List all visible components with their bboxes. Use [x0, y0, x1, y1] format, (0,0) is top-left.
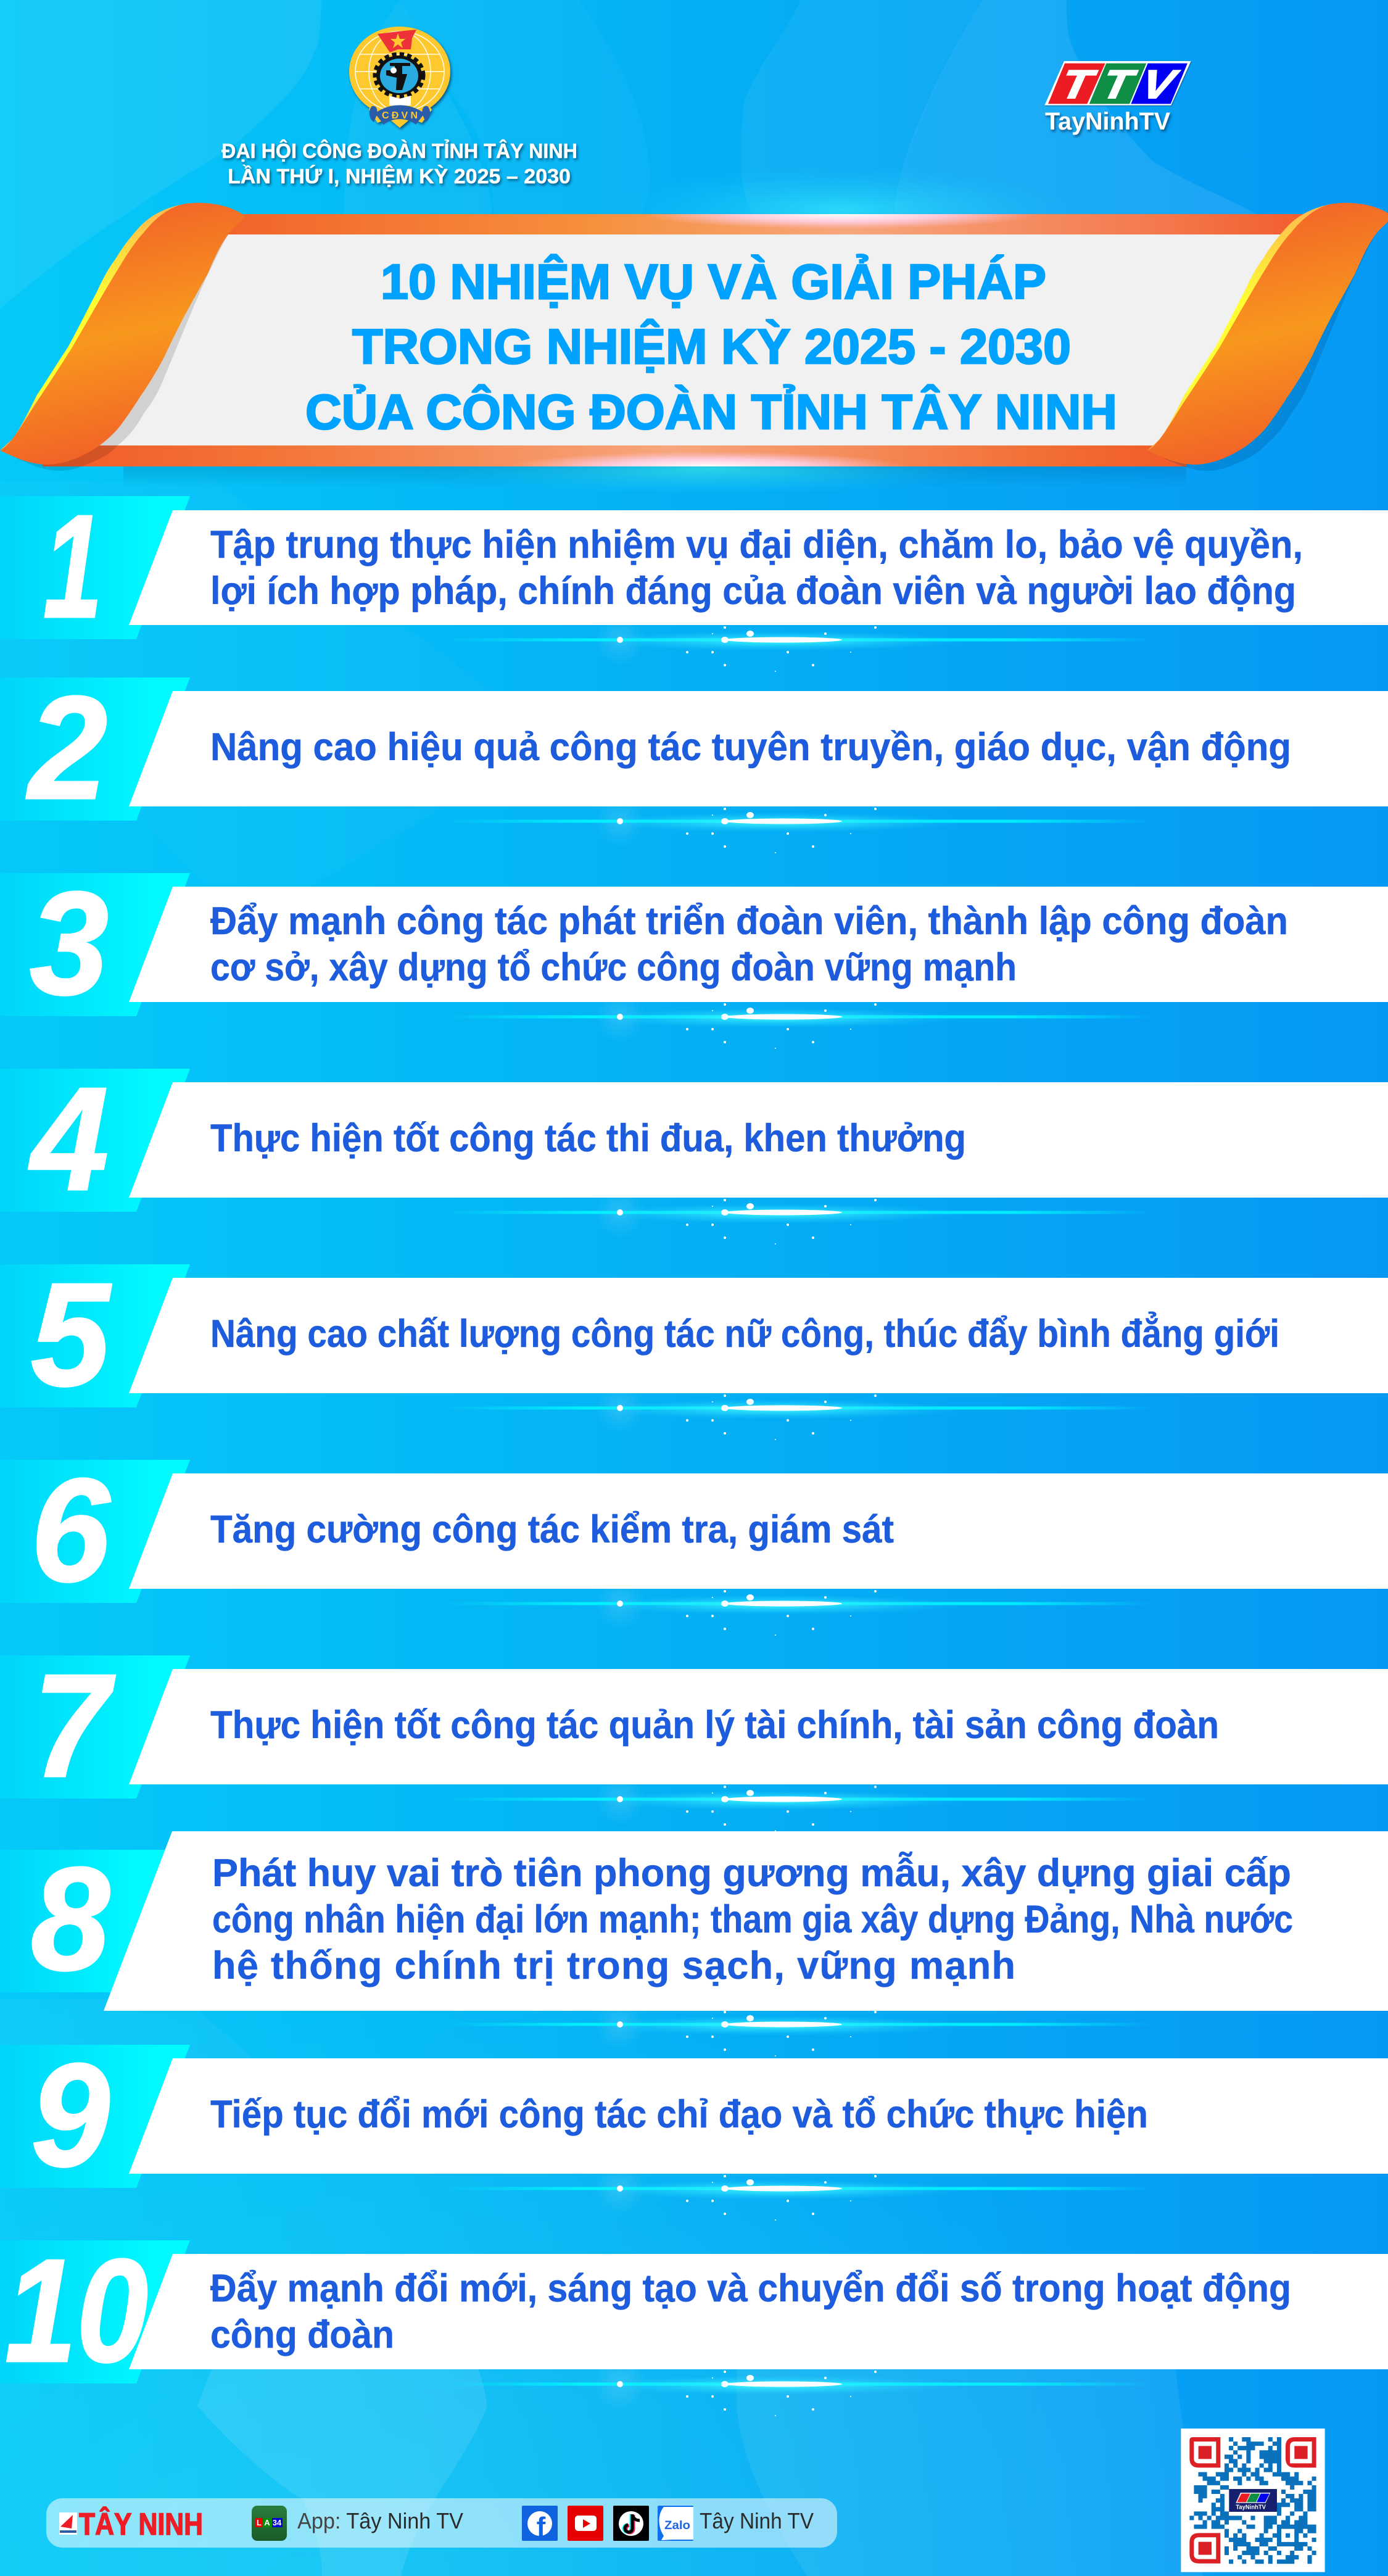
item 7 [0, 1644, 1388, 1808]
icon: app [252, 2506, 287, 2541]
banner title: 10 NHIỆM VỤ VÀ GIẢI PHÁP [381, 254, 1046, 309]
left ribbon [0, 203, 246, 471]
item 1: 1 [43, 485, 102, 648]
social label: Tây Ninh TV [700, 2508, 814, 2533]
item 3: cơ sở, xây dựng tổ chức công đoàn vững mạnh [210, 946, 1017, 989]
item 8: Phát huy vai trò tiên phong gương mẫu, xây dựng giai cấp [212, 1852, 1291, 1895]
item 4: Thực hiện tốt công tác thi đua, khen thưởng [210, 1117, 966, 1160]
item 9: 9 [31, 2034, 110, 2197]
item 9: Tiếp tục đổi mới công tác chỉ đạo và tổ chức thực hiện [210, 2093, 1148, 2136]
item 1: Tập trung thực hiện nhiệm vụ đại diện, chăm lo, bảo vệ quyền, [210, 523, 1303, 566]
congress heading [221, 139, 577, 188]
light flare 6 [444, 1578, 1154, 1636]
item 5 [0, 1253, 1388, 1417]
item 6: 6 [31, 1449, 111, 1612]
light flare 5 [444, 1382, 1154, 1440]
icon: app: A [264, 2518, 270, 2527]
item 6 [0, 1449, 1388, 1612]
item 3 [0, 862, 1388, 1025]
item 2 [0, 666, 1388, 830]
icon: youtube [568, 2506, 603, 2541]
banner title: TRONG NHIỆM KỲ 2025 - 2030 [352, 319, 1071, 374]
item 8: 8 [31, 1837, 110, 2001]
icon: app: 34 [273, 2518, 282, 2527]
item 2: Nâng cao hiệu quả công tác tuyên truyền, giáo dục, vận động [210, 726, 1291, 769]
icon: tiktok [613, 2506, 649, 2541]
light flare 1 [444, 614, 1154, 672]
icon: zalo [658, 2506, 693, 2541]
QR code: TayNinhTV [1236, 2504, 1266, 2511]
light flare 2 [444, 795, 1154, 853]
congress heading: LẦN THỨ I, NHIỆM KỲ 2025 – 2030 [228, 165, 571, 188]
item 10 [0, 2229, 1388, 2393]
item 1 [0, 485, 1388, 648]
icon: facebook: f [537, 2512, 546, 2542]
item 8: hệ thống chính trị trong sạch, vững mạnh [212, 1944, 1015, 1987]
TTV logo [1044, 61, 1191, 135]
union emblem: CĐVN [382, 110, 418, 121]
item 4 [0, 1058, 1388, 1221]
item 7: 7 [33, 1644, 115, 1808]
item 8 [0, 1831, 1388, 2011]
item 1: lợi ích hợp pháp, chính đáng của đoàn viên và người lao động [210, 569, 1296, 613]
TTV logo: T [1094, 62, 1142, 107]
app label: App: Tây Ninh TV [297, 2508, 463, 2533]
banner title: CỦA CÔNG ĐOÀN TỈNH TÂY NINH [305, 384, 1117, 439]
item 5: Nâng cao chất lượng công tác nữ công, thúc đẩy bình đẳng giới [210, 1311, 1279, 1356]
Tây Ninh newspaper logo: TÂY NINH [79, 2507, 203, 2541]
light flare 7 [444, 1773, 1154, 1831]
item 10: công đoàn [210, 2313, 394, 2356]
item 3: Đẩy mạnh công tác phát triển đoàn viên, thành lập công đoàn [210, 900, 1288, 943]
TTV logo: T [1052, 62, 1102, 107]
item 9 [0, 2034, 1388, 2197]
union emblem [349, 27, 450, 128]
TTV logo: TayNinhTV [1045, 108, 1170, 135]
footer bar [46, 2498, 837, 2548]
congress heading: ĐẠI HỘI CÔNG ĐOÀN TỈNH TÂY NINH [221, 139, 577, 162]
banner title [305, 254, 1117, 439]
light flare 8 [444, 1998, 1154, 2056]
QR code [1181, 2429, 1325, 2572]
item 2: 2 [26, 666, 107, 830]
icon: app: L [257, 2518, 262, 2527]
light flare 4 [444, 1187, 1154, 1245]
title banner [0, 203, 1388, 487]
right ribbon [1147, 203, 1388, 471]
item 10: 10 [5, 2229, 148, 2393]
item 5: 5 [31, 1253, 112, 1417]
item 7: Thực hiện tốt công tác quản lý tài chính, tài sản công đoàn [210, 1704, 1219, 1747]
item 6: Tăng cường công tác kiểm tra, giám sát [210, 1508, 894, 1551]
light flare 10 [444, 2358, 1154, 2416]
light flare 3 [444, 991, 1154, 1049]
icon: facebook [522, 2506, 558, 2542]
icon: zalo: Zalo [664, 2519, 690, 2532]
item 4: 4 [28, 1058, 109, 1221]
item 3: 3 [30, 862, 109, 1025]
light flare 9 [444, 2163, 1154, 2221]
item 10: Đẩy mạnh đổi mới, sáng tạo và chuyển đổi số trong hoạt động [210, 2267, 1291, 2310]
TTV logo: V [1133, 62, 1184, 107]
